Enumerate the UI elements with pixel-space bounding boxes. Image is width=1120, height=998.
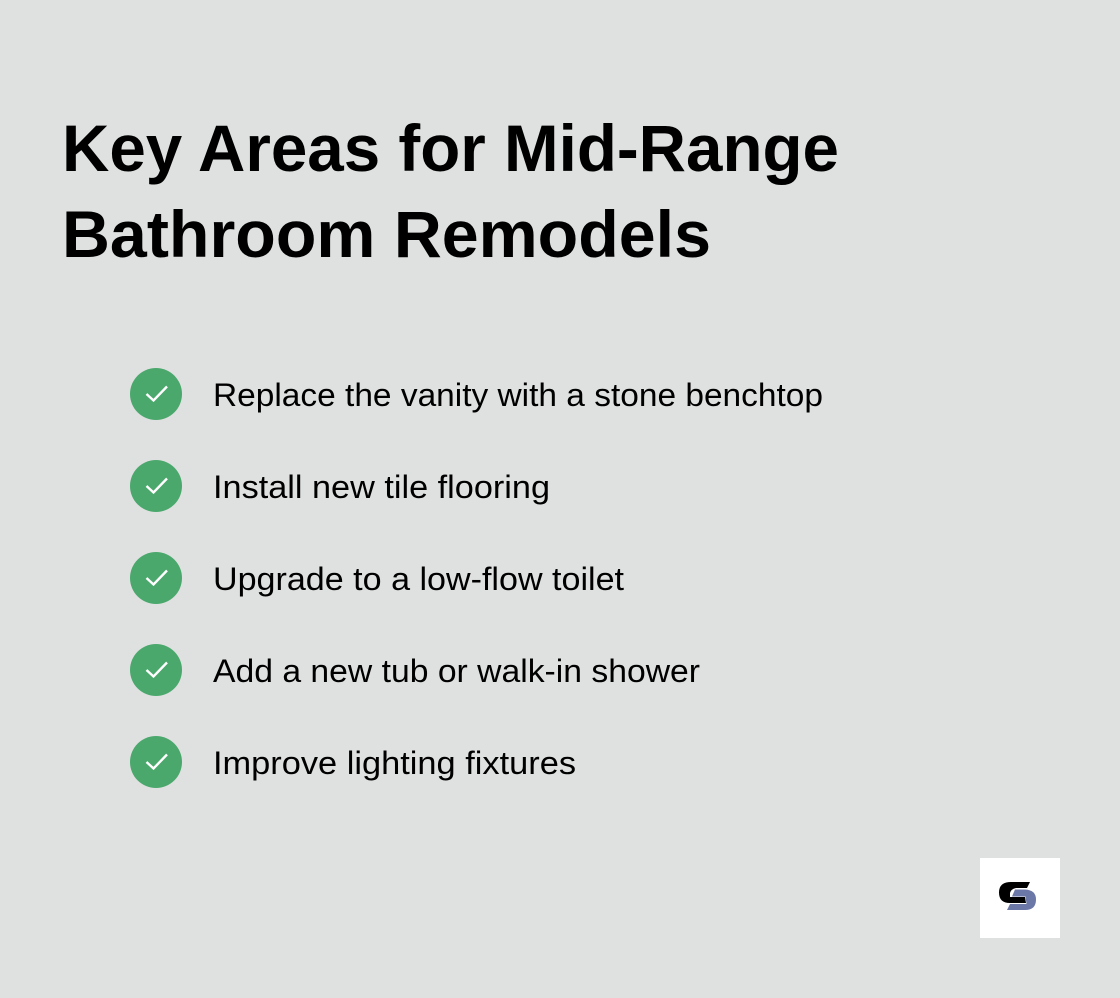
item 2: flooring: Install new tile flooring <box>213 469 550 505</box>
logo <box>980 858 1060 938</box>
item 3: toilet <box>130 552 624 604</box>
item 4: tub or shower <box>130 644 700 696</box>
checklist <box>130 368 823 788</box>
item 3: toilet: Upgrade to a low-flow toilet <box>213 561 624 597</box>
title <box>62 111 839 271</box>
item 5: lighting <box>130 736 576 788</box>
item 4: tub or shower: Add a new tub or walk-in shower <box>213 653 700 689</box>
item 1: vanity: Replace the vanity with a stone benchtop <box>213 377 823 413</box>
item 2: flooring <box>130 460 550 512</box>
title: Key Areas for Mid-Range <box>62 111 839 185</box>
title: Bathroom Remodels <box>62 197 711 271</box>
item 1: vanity <box>130 368 823 420</box>
item 5: lighting: Improve lighting fixtures <box>213 745 576 781</box>
